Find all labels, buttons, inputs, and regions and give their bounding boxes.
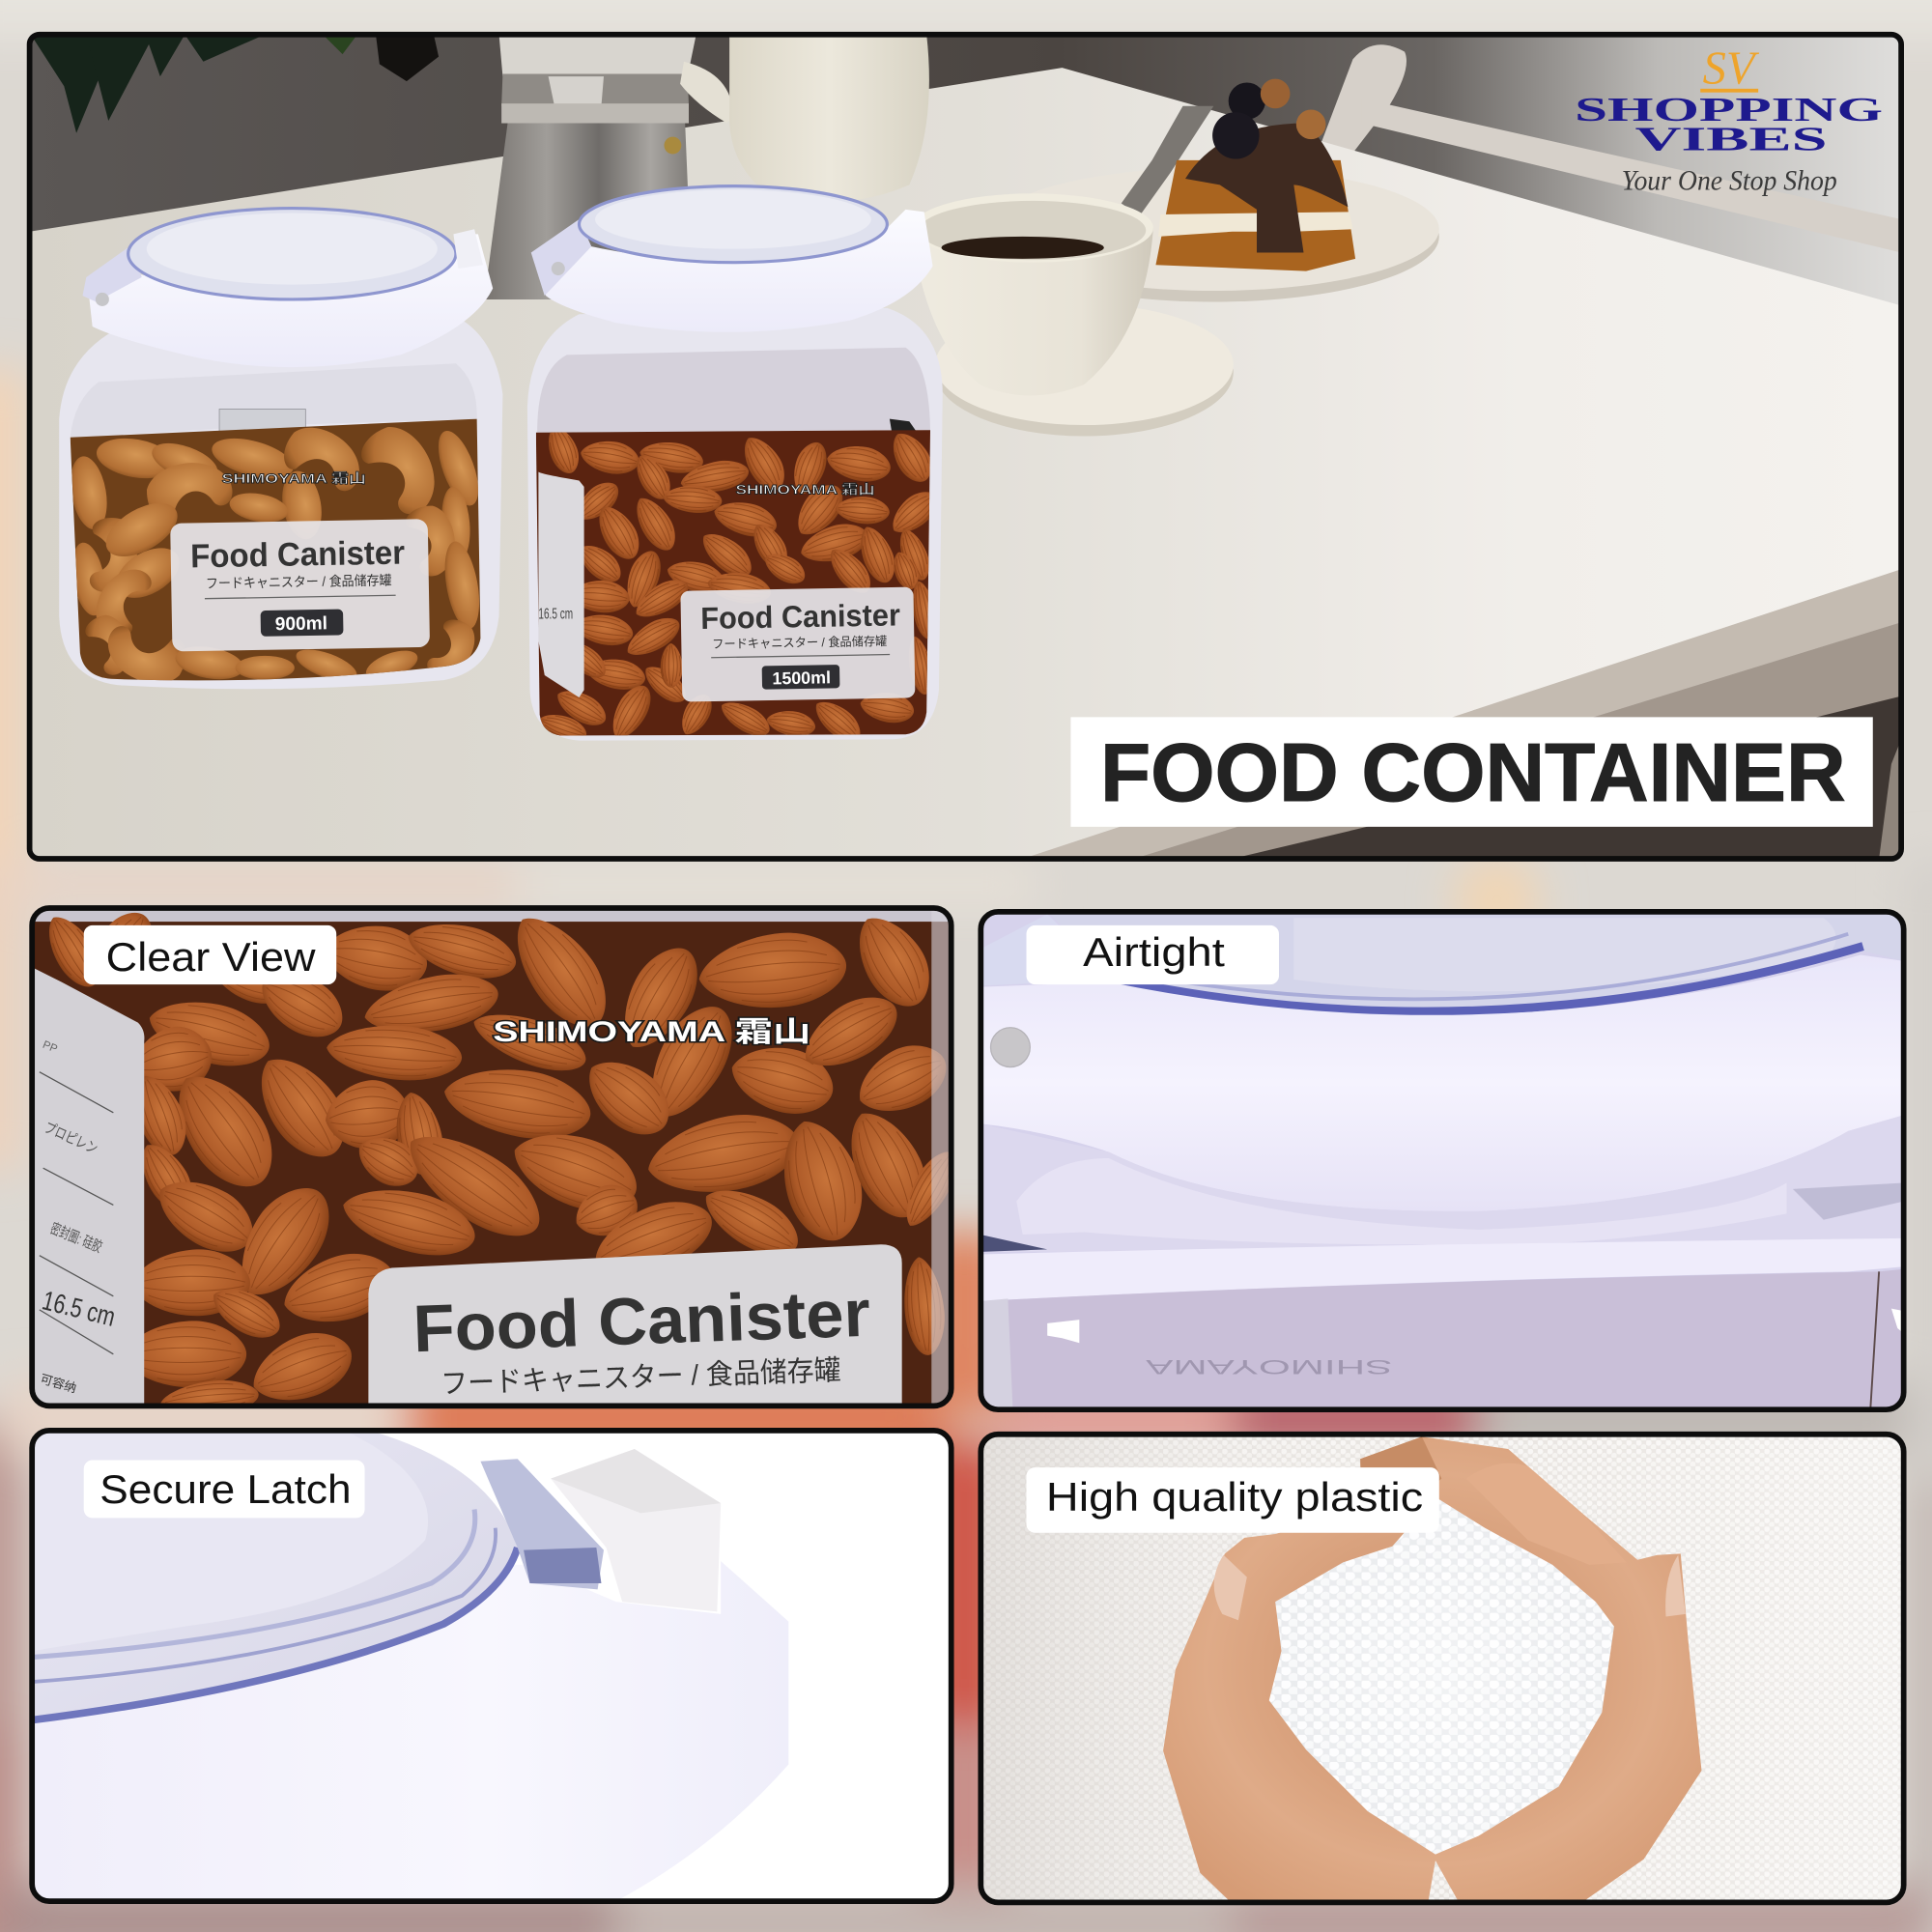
cake slice (1155, 79, 1355, 271)
label: Secure Latch (84, 1460, 365, 1518)
side label (538, 472, 584, 697)
label: Secure Latch: Secure Latch (99, 1466, 352, 1512)
canister: 900ml cashews (59, 209, 502, 693)
pellet mound (1269, 1497, 1614, 1855)
plastic bead background (980, 1435, 1904, 1902)
lid ring (542, 210, 933, 332)
product label (680, 587, 915, 702)
white jug (680, 35, 929, 202)
jar shoulder (980, 1115, 1904, 1252)
product label: 1500ml (772, 668, 831, 688)
logo: Your One Stop Shop (1622, 165, 1837, 196)
panel: Airtight (983, 914, 1901, 1406)
hands (1163, 1436, 1701, 1902)
title banner: FOOD CONTAINER (1100, 727, 1846, 819)
canister: 1500ml almonds (527, 186, 945, 749)
plate (1140, 180, 1439, 301)
lid ring (89, 234, 493, 367)
product label close-up: フードキャニスター / 食品储存罐 (440, 1354, 841, 1401)
cashew filling (62, 412, 487, 693)
side label panel: PP (41, 1039, 59, 1056)
label: Clear View (84, 925, 336, 984)
clear lid (531, 186, 887, 296)
empty label zone (980, 1269, 1904, 1409)
lid band (980, 955, 1904, 1211)
side label: 16.5 cm (538, 606, 573, 622)
label: Clear View: Clear View (106, 934, 316, 980)
chair back (1319, 44, 1901, 252)
panel: hero photo with two canisters on table (33, 37, 1899, 856)
fork (1122, 106, 1213, 215)
product label (170, 519, 430, 651)
product label: 900ml (275, 613, 327, 635)
label: High quality plastic (1026, 1467, 1439, 1533)
product label: Food Canister (700, 597, 900, 636)
product label: フードキャニスター / 食品储存罐 (206, 572, 392, 591)
product label: Food Canister (190, 535, 405, 575)
lid pin hole (991, 1028, 1030, 1067)
label: Airtight: Airtight (1083, 929, 1225, 975)
almond filling (529, 422, 945, 749)
moka pot (484, 35, 696, 299)
panel: High quality plastic (983, 1437, 1901, 1899)
clear lid (82, 209, 483, 301)
logo: SV (1703, 43, 1760, 95)
white lid ring (32, 1561, 788, 1901)
white seam band (980, 1238, 1904, 1301)
side label panel: 密封圈: 硅胶 (48, 1220, 104, 1256)
empty label zone: SHIMOYAMA (1145, 1355, 1392, 1379)
plant leaves (31, 35, 439, 133)
side label panel: 16.5 cm (40, 1285, 118, 1332)
table underside (1023, 569, 1901, 859)
logo: SHOPPING (1575, 92, 1883, 128)
side label panel (32, 967, 144, 1406)
coffee cup (912, 193, 1153, 395)
hinge clip (524, 1548, 601, 1583)
almond photo (37, 900, 966, 1420)
clear lid close-up (980, 912, 1904, 1015)
panel: Secure Latch (35, 1434, 949, 1899)
brand mark: SHIMOYAMA 霜山 (735, 481, 875, 497)
clear lid corner (32, 1431, 604, 1720)
wall (33, 37, 1898, 305)
product label close-up (368, 1244, 902, 1406)
brand mark: SHIMOYAMA 霜山 (493, 1016, 810, 1048)
logo (1575, 43, 1883, 196)
label: Airtight (1026, 925, 1279, 984)
side label panel: プロピレン (42, 1120, 100, 1157)
saucer (935, 304, 1234, 437)
logo: VIBES (1635, 122, 1828, 158)
side label panel: 可容纳 (39, 1372, 78, 1396)
table surface (30, 68, 1901, 859)
label: High quality plastic: High quality plastic (1046, 1474, 1423, 1520)
product label: フードキャニスター / 食品储存罐 (712, 634, 888, 651)
latch block (551, 1449, 721, 1611)
panel: Clear View (35, 911, 949, 1403)
product label close-up: Food Canister (412, 1276, 871, 1366)
brand mark: SHIMOYAMA 霜山 (222, 470, 366, 486)
